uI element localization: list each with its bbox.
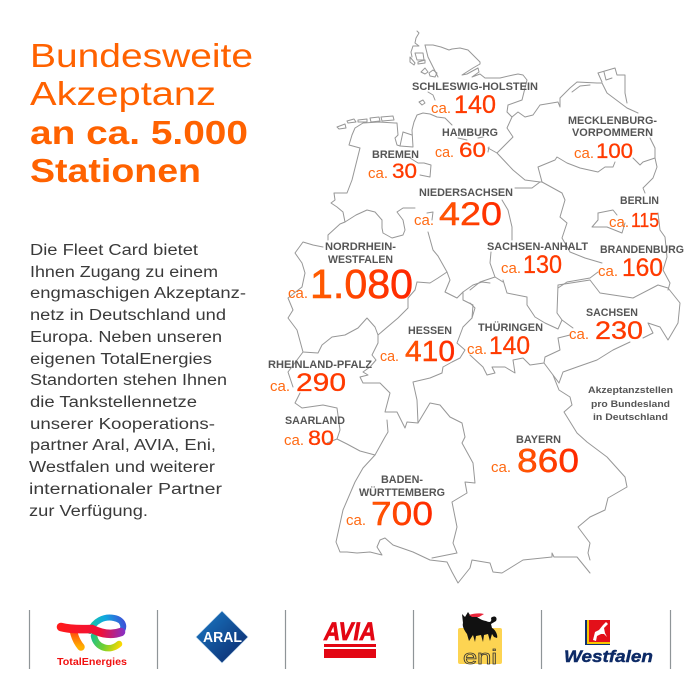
logo: Aral — [196, 611, 248, 663]
body text: partner Aral, AVIA, Eni, — [30, 437, 216, 454]
label: Sachsen-Anhalt: SACHSEN-ANHALT — [487, 241, 588, 253]
map of Germany — [288, 31, 680, 583]
body text: Ihnen Zugang zu einem — [30, 264, 218, 281]
label: Mecklenburg-Vorpommern: 100 — [596, 140, 633, 163]
logo: AVIA: AVIA — [323, 618, 376, 646]
label: Nordrhein-Westfalen: 1.080 — [310, 261, 413, 307]
label: Baden-Württemberg: WÜRTTEMBERG — [359, 486, 445, 499]
title: Akzeptanz — [30, 76, 216, 113]
map note: in Deutschland — [593, 412, 668, 423]
logo: Westfalen — [564, 620, 653, 666]
label: Sachsen — [569, 307, 643, 345]
label: Nordrhein-Westfalen: WESTFALEN — [328, 254, 393, 266]
body text: eigenen TotalEnergies — [30, 351, 212, 368]
logo: TotalEnergies — [57, 618, 127, 668]
label: Berlin — [609, 195, 659, 232]
logo: Eni: eni — [463, 647, 497, 669]
label: Saarland: SAARLAND — [285, 415, 345, 427]
body text — [29, 242, 246, 520]
label: Hessen: ca. — [380, 348, 399, 365]
label: Brandenburg — [598, 244, 684, 282]
body text: netz in Deutschland und — [30, 307, 226, 324]
label: Bremen: ca. — [368, 165, 388, 182]
label: Sachsen-Anhalt — [487, 241, 588, 279]
body text: Standorten stehen Ihnen — [30, 372, 227, 389]
label: Brandenburg: BRANDENBURG — [600, 244, 684, 256]
label: Schleswig-Holstein: SCHLESWIG-HOLSTEIN — [412, 81, 538, 93]
label: Schleswig-Holstein: 140 — [454, 91, 496, 119]
label: Baden-Württemberg: 700 — [371, 495, 433, 532]
label: Sachsen: 230 — [595, 317, 643, 345]
label: Berlin: 115 — [631, 210, 659, 232]
label: Baden-Württemberg: ca. — [346, 512, 366, 529]
map note: Akzeptanzstellen — [588, 385, 673, 396]
label: Sachsen-Anhalt: ca. — [501, 260, 521, 277]
title: an ca. 5.000 — [30, 115, 248, 152]
body text: zur Verfügung. — [29, 503, 148, 520]
title: Stationen — [30, 153, 201, 190]
label: Hamburg — [435, 127, 498, 162]
body text: Europa. Neben unseren — [30, 329, 222, 346]
body text: unserer Kooperations- — [30, 416, 215, 433]
label: Hessen: HESSEN — [408, 325, 452, 337]
label: Rheinland-Pfalz: ca. — [270, 378, 290, 395]
label: Berlin: ca. — [609, 214, 629, 231]
label: Rheinland-Pfalz: RHEINLAND-PFALZ — [268, 359, 372, 371]
map note: pro Bundesland — [591, 399, 670, 410]
logo: TotalEnergies: TotalEnergies — [57, 656, 127, 668]
label: Mecklenburg-Vorpommern: MECKLENBURG- — [568, 115, 657, 127]
label: Saarland — [284, 415, 345, 450]
map note — [588, 385, 673, 423]
logo: Aral: ARAL — [203, 630, 242, 646]
label: Sachsen: SACHSEN — [586, 307, 638, 319]
label: Hessen: 410 — [405, 336, 455, 368]
logo: Eni — [458, 612, 502, 669]
title — [30, 38, 253, 190]
label: Nordrhein-Westfalen: NORDRHEIN- — [325, 241, 396, 253]
body text: Westfalen und weiterer — [29, 459, 215, 476]
label: Bremen — [368, 149, 419, 183]
label: Saarland: ca. — [284, 432, 304, 449]
label: Berlin: BERLIN — [620, 195, 659, 207]
label: Thüringen: 140 — [489, 332, 530, 360]
label: Niedersachsen — [414, 187, 513, 232]
label: Thüringen: THÜRINGEN — [478, 321, 543, 334]
label: Mecklenburg-Vorpommern: ca. — [574, 145, 594, 162]
label: Brandenburg: ca. — [598, 263, 618, 280]
label: Bayern: ca. — [491, 459, 511, 476]
label: Hamburg: ca. — [435, 144, 454, 161]
label: Bremen: 30 — [392, 160, 417, 183]
label: Thüringen — [467, 321, 543, 360]
label: Niedersachsen: NIEDERSACHSEN — [419, 187, 513, 199]
label: Schleswig-Holstein: ca. — [431, 100, 451, 117]
label: Niedersachsen: ca. — [414, 212, 434, 229]
label: Bayern: 860 — [517, 442, 579, 479]
body text: Die Fleet Card bietet — [30, 242, 199, 259]
label: Hamburg: HAMBURG — [442, 127, 498, 139]
label: Nordrhein-Westfalen — [288, 241, 413, 307]
label: Baden-Württemberg: BADEN- — [381, 474, 423, 486]
label: Sachsen-Anhalt: 130 — [523, 251, 562, 279]
label: Bremen: BREMEN — [372, 149, 419, 161]
body text: internationaler Partner — [29, 481, 222, 498]
label: Hessen — [380, 325, 455, 368]
label: Nordrhein-Westfalen: ca. — [288, 285, 308, 302]
label: Rheinland-Pfalz — [268, 359, 372, 397]
label: Hamburg: 60 — [459, 139, 486, 162]
logo: Westfalen: Westfalen — [564, 647, 653, 666]
label: Brandenburg: 160 — [622, 254, 663, 282]
label: Sachsen: ca. — [569, 326, 589, 343]
label: Niedersachsen: 420 — [439, 196, 502, 232]
label: Mecklenburg-Vorpommern — [568, 115, 657, 163]
label: Mecklenburg-Vorpommern: VORPOMMERN — [572, 127, 653, 139]
label: Saarland: 80 — [308, 427, 334, 450]
label: Rheinland-Pfalz: 290 — [296, 369, 346, 397]
body text: engmaschigen Akzeptanz- — [30, 285, 246, 302]
label: Baden-Württemberg — [346, 474, 445, 532]
label: Bayern: BAYERN — [516, 434, 561, 446]
label: Bayern — [491, 434, 579, 479]
label: Thüringen: ca. — [467, 341, 487, 358]
title: Bundesweite — [30, 38, 253, 75]
logo: AVIA — [323, 618, 376, 658]
body text: die Tankstellennetze — [30, 394, 197, 411]
label: Schleswig-Holstein — [412, 81, 538, 119]
